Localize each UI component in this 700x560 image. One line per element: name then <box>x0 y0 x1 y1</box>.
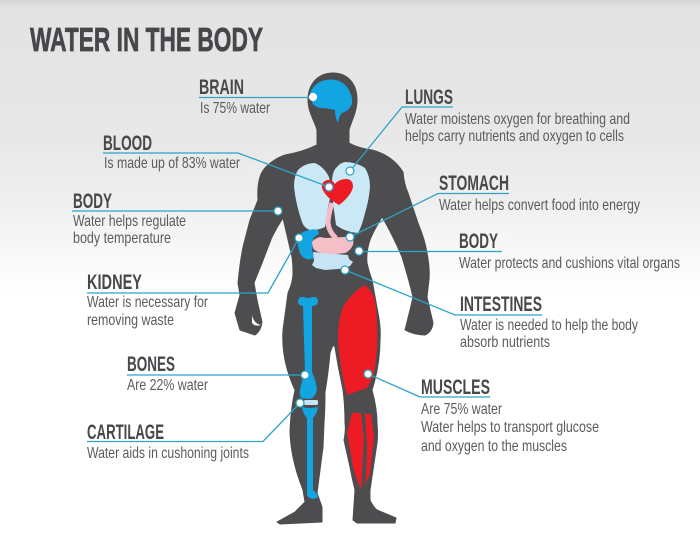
description: helps carry nutrients and oxygen to cells <box>405 128 624 145</box>
marker <box>364 370 372 378</box>
description: Water aids in cushoning joints <box>87 445 249 462</box>
heading: BRAIN <box>199 76 244 99</box>
description <box>460 317 638 351</box>
label: bones <box>127 353 309 394</box>
title: WATER IN THE BODY <box>30 21 263 58</box>
description: Are 22% water <box>127 377 209 394</box>
heading: STOMACH <box>439 172 509 195</box>
heading: BONES <box>127 353 175 376</box>
marker <box>274 207 282 215</box>
label: intestines <box>341 266 638 351</box>
thumb highlight <box>252 315 261 326</box>
leader line <box>350 194 509 237</box>
description: Water is necessary for <box>87 294 209 311</box>
femur bone <box>298 297 318 399</box>
leader line <box>87 238 299 293</box>
label: muscles <box>364 370 599 455</box>
description: Are 75% water <box>421 401 503 418</box>
marker <box>301 371 309 379</box>
marker <box>310 94 316 100</box>
label: brain <box>199 76 316 117</box>
heading: BODY <box>459 230 498 253</box>
description <box>405 111 630 145</box>
description: body temperature <box>73 230 171 247</box>
description: Is made up of 83% water <box>104 155 241 172</box>
leader line <box>368 374 490 397</box>
heading: BLOOD <box>103 132 152 155</box>
calf muscles <box>347 413 374 490</box>
label: kidney <box>87 234 303 329</box>
esophagus <box>328 203 336 238</box>
heading: LUNGS <box>405 86 453 109</box>
intestines <box>312 252 353 270</box>
description: Water moistens oxygen for breathing and <box>405 111 630 128</box>
heading: KIDNEY <box>87 271 142 294</box>
leader line <box>87 403 300 442</box>
label: stomach <box>346 172 640 241</box>
thigh muscle <box>338 285 377 395</box>
leader line <box>72 210 278 212</box>
leader line <box>199 96 313 98</box>
label: body temperature <box>72 190 282 247</box>
tibia bone <box>302 407 318 499</box>
description: absorb nutrients <box>460 334 550 351</box>
stomach <box>312 235 353 254</box>
description: Water helps to transport glucose <box>421 419 599 436</box>
marker <box>296 399 304 407</box>
description: and oxygen to the muscles <box>421 438 567 455</box>
description: Water helps regulate <box>73 213 186 230</box>
heading: CARTILAGE <box>87 421 164 444</box>
description <box>87 294 209 329</box>
marker <box>325 183 333 191</box>
leader line <box>350 107 453 171</box>
description: Water helps convert food into energy <box>439 197 640 214</box>
marker <box>346 233 354 241</box>
cartilage <box>304 400 318 405</box>
kidney <box>298 229 319 259</box>
heart <box>322 179 353 205</box>
label: blood <box>103 132 333 191</box>
leader line <box>345 270 542 315</box>
leader line <box>359 250 502 252</box>
leader line <box>103 153 329 187</box>
label: body organs <box>355 230 680 272</box>
leader line <box>127 374 305 376</box>
marker <box>346 167 354 175</box>
body silhouette <box>235 73 433 524</box>
label: lungs <box>346 86 630 175</box>
description: Water is needed to help the body <box>460 317 638 334</box>
heading: INTESTINES <box>460 293 542 316</box>
marker <box>295 234 303 242</box>
marker <box>341 266 349 274</box>
description <box>421 401 599 455</box>
description <box>73 213 186 247</box>
heading: MUSCLES <box>421 376 490 399</box>
description: Is 75% water <box>200 100 271 117</box>
human body figure <box>235 73 433 524</box>
marker <box>355 247 363 255</box>
description: removing waste <box>87 312 174 329</box>
heading: BODY <box>73 190 112 213</box>
label: cartilage <box>87 399 304 462</box>
brain <box>310 79 352 123</box>
lungs <box>294 162 370 233</box>
